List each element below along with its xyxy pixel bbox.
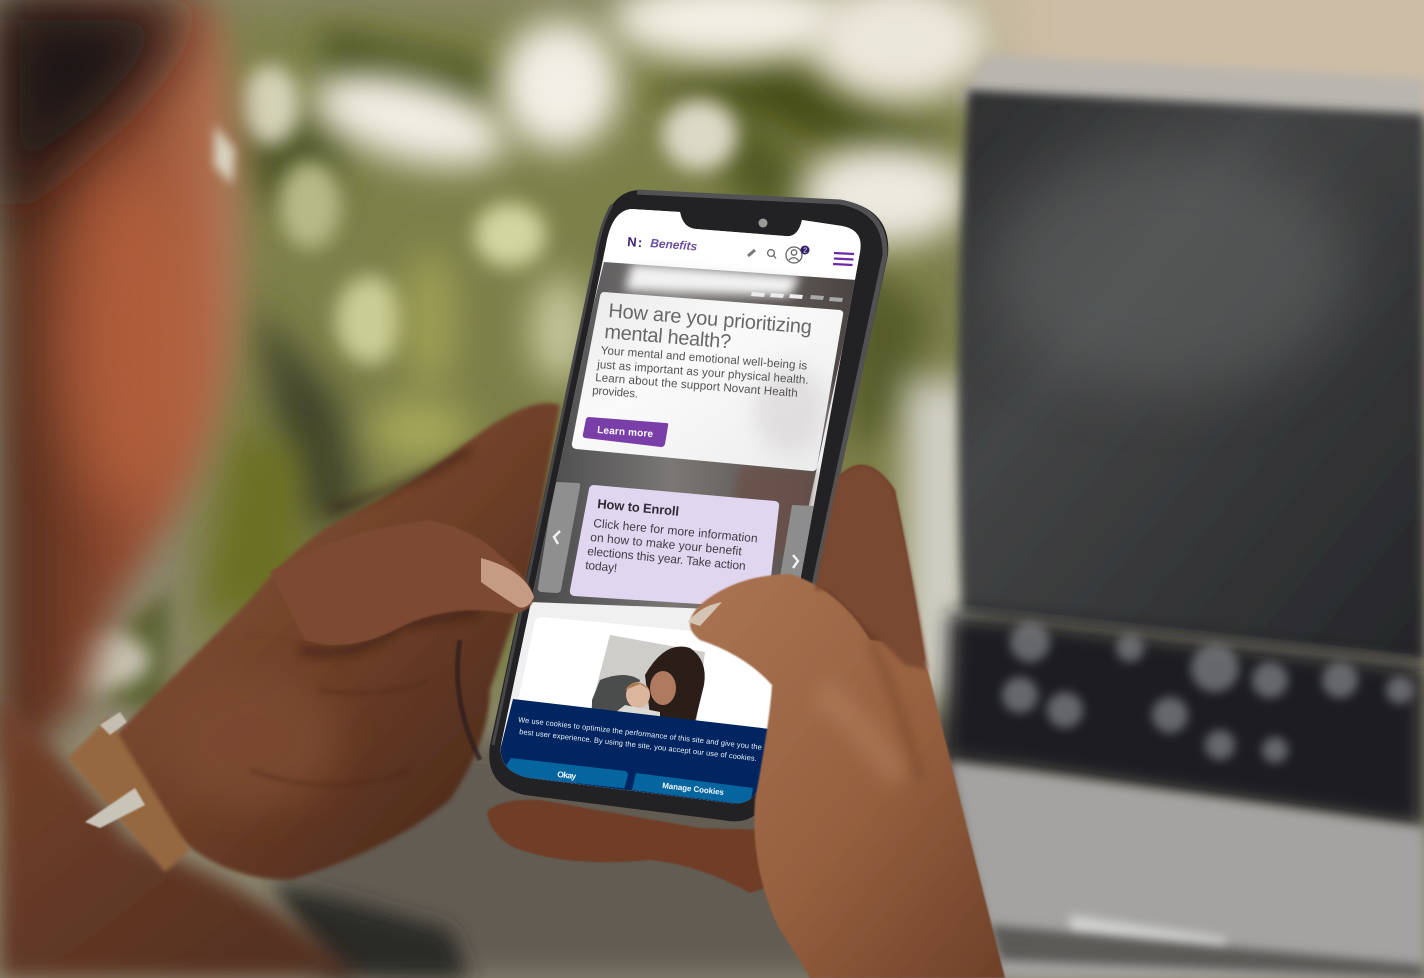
heading: mental health? bbox=[604, 321, 732, 353]
okay button bbox=[500, 758, 628, 788]
card body text: Click here for more information bbox=[593, 516, 758, 546]
right carousel tab with arrow bbox=[780, 505, 815, 580]
heading: How are you prioritizing bbox=[608, 300, 813, 339]
header bar bbox=[604, 209, 861, 280]
icon: link bbox=[748, 250, 755, 256]
card heading: How to Enroll bbox=[597, 496, 680, 519]
hero card bbox=[572, 292, 843, 471]
cookie banner bbox=[500, 699, 768, 804]
notification badge: 2 bbox=[803, 248, 807, 254]
body text bbox=[592, 344, 809, 401]
phone case bbox=[489, 190, 888, 821]
body text: just as important as your physical health. bbox=[596, 358, 809, 387]
card body text: elections this year. Take action bbox=[587, 544, 746, 573]
left hand holding phone bbox=[68, 403, 560, 880]
blurred plant foliage bbox=[30, 0, 990, 715]
cookie text: best user experience. By using the site, you accept our use of cookies. bbox=[519, 727, 757, 763]
card body text bbox=[585, 516, 758, 575]
notification badge bbox=[800, 246, 810, 254]
brand name: Benefits bbox=[650, 236, 698, 253]
family photo bbox=[590, 635, 705, 725]
body text: Learn about the support Novant Health bbox=[595, 371, 798, 400]
enroll card bbox=[570, 485, 779, 608]
laptop bbox=[945, 55, 1424, 978]
hand reflection on screen bbox=[732, 465, 820, 556]
learn more button bbox=[583, 417, 668, 447]
learn more button: Learn more bbox=[597, 425, 654, 440]
camera notch bbox=[758, 218, 768, 228]
left thumb over phone edge bbox=[270, 520, 534, 645]
cookie text: We use cookies to optimize the performance of this site and give you the bbox=[518, 715, 762, 752]
body text: provides. bbox=[592, 384, 639, 401]
hero and carousel background band bbox=[530, 262, 855, 608]
right hand and index finger over phone bbox=[688, 466, 1005, 978]
icon: hamburger menu bbox=[833, 253, 854, 265]
lower white card bbox=[518, 617, 772, 728]
right palm behind the phone bbox=[800, 465, 925, 720]
icon: user bbox=[786, 247, 802, 263]
phone screen bbox=[500, 209, 861, 804]
lower page area bbox=[500, 602, 757, 804]
body text: Your mental and emotional well-being is bbox=[600, 344, 808, 373]
okay button: Okay bbox=[557, 769, 577, 781]
phone bbox=[480, 190, 900, 830]
person's blurred head and shoulder bbox=[0, 0, 360, 978]
logo: N: bbox=[627, 234, 643, 250]
icon: search bbox=[768, 250, 776, 258]
left carousel tab with arrow bbox=[538, 482, 580, 593]
manage cookies button bbox=[632, 773, 753, 805]
card body text: today! bbox=[585, 558, 618, 575]
card body text: on how to make your benefit bbox=[590, 530, 743, 558]
slide indicator dots bbox=[751, 292, 843, 302]
lower thumb base of right hand bbox=[487, 800, 790, 893]
manage cookies button: Manage Cookies bbox=[662, 781, 725, 797]
